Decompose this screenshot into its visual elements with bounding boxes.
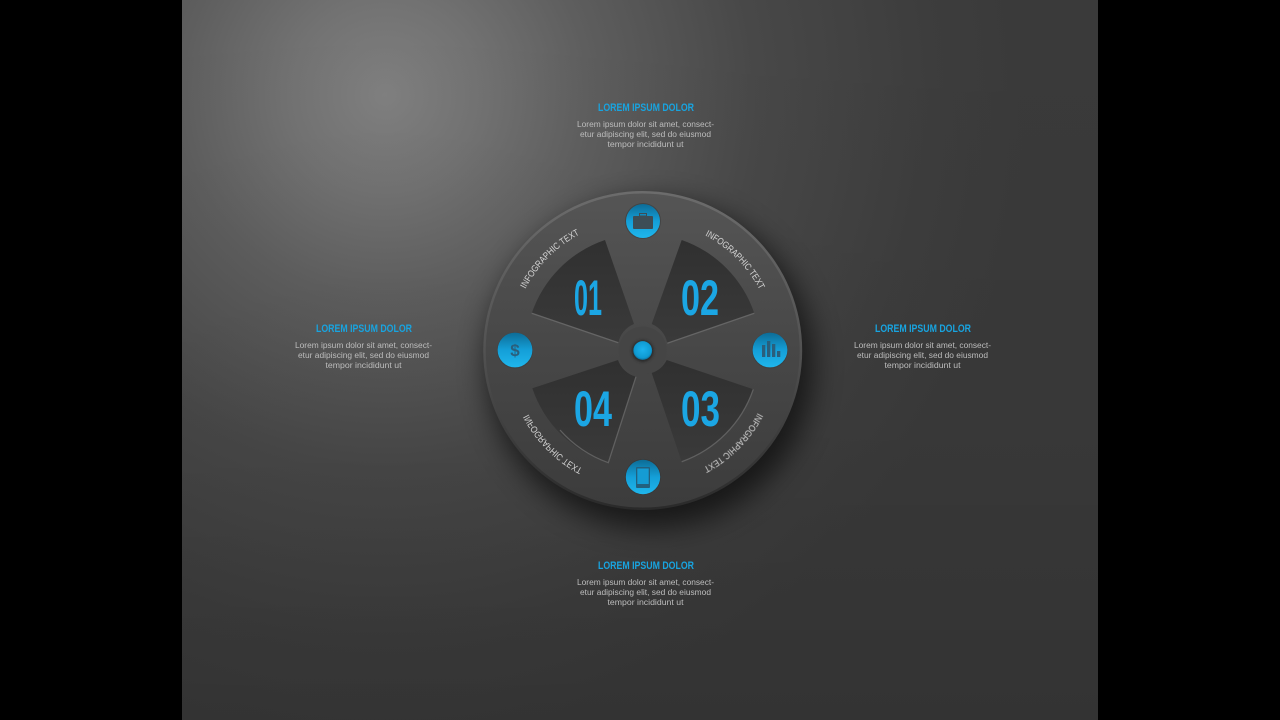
text block: left: [295, 323, 432, 370]
text block: left: LOREM IPSUM DOLOR: [316, 323, 412, 335]
text block: top: LOREM IPSUM DOLOR: [598, 102, 694, 114]
text block: right: Lorem ipsum dolor sit amet, consect-: [854, 341, 991, 350]
text block: right: [854, 323, 991, 370]
text block: bottom: [577, 560, 714, 607]
text block: left: tempor incididunt ut: [326, 361, 402, 370]
icon: phone: [625, 459, 661, 495]
wedge 01: 01: [574, 270, 602, 326]
text block: left: etur adipiscing elit, sed do eiusmod: [298, 351, 429, 360]
text block: bottom: etur adipiscing elit, sed do eiusmod: [580, 588, 711, 597]
text block: top: [577, 102, 714, 149]
hub: [619, 326, 667, 374]
icon: briefcase: [625, 203, 661, 239]
background panel: [182, 0, 1098, 720]
wedge 02: [652, 240, 754, 343]
text block: left: Lorem ipsum dolor sit amet, consect-: [295, 341, 432, 350]
curved label 02: INFOGRAPHIC TEXT: [706, 230, 766, 288]
icon: dollar: $: [510, 341, 520, 360]
wedge 03: [652, 360, 753, 462]
wedge 02: 02: [681, 270, 719, 326]
text block: top: tempor incididunt ut: [608, 140, 684, 149]
wheel: [473, 187, 824, 538]
text block: right: LOREM IPSUM DOLOR: [875, 323, 971, 335]
wedge 01: [532, 240, 634, 343]
text block: bottom: Lorem ipsum dolor sit amet, consect-: [577, 578, 714, 587]
curved label 03: INFOGRAPHIC TEXT: [705, 413, 764, 473]
curved label 04: INFOGRAPHIC TEXT: [523, 414, 581, 474]
text block: top: etur adipiscing elit, sed do eiusmod: [580, 130, 711, 139]
wedge 04: [532, 360, 636, 463]
icon: bar chart: [752, 332, 788, 368]
wedge 03: 03: [681, 381, 720, 437]
text block: bottom: tempor incididunt ut: [608, 598, 684, 607]
icon: dollar: [497, 332, 533, 368]
wedge 04: 04: [574, 381, 612, 437]
curved label 01: INFOGRAPHIC TEXT: [520, 228, 578, 288]
text block: right: tempor incididunt ut: [884, 361, 961, 370]
text block: top: Lorem ipsum dolor sit amet, consect-: [577, 120, 714, 129]
text block: right: etur adipiscing elit, sed do eiusmod: [857, 351, 988, 360]
text block: bottom: LOREM IPSUM DOLOR: [598, 560, 694, 572]
